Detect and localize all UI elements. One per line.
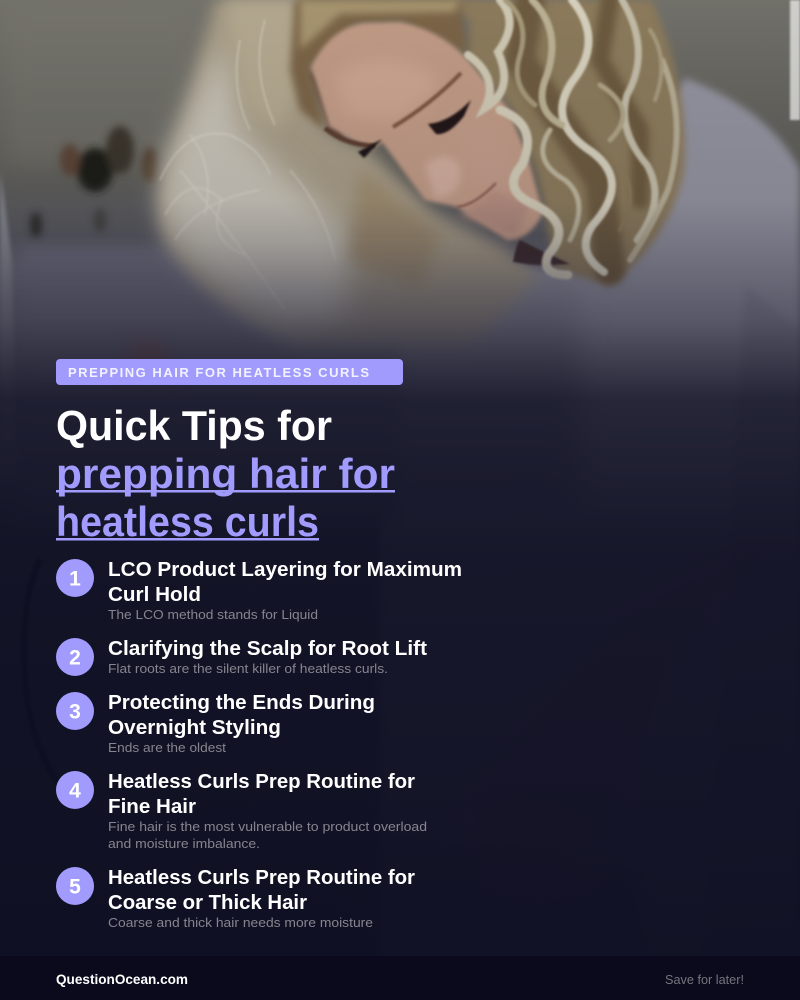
footer bar (0, 956, 800, 1000)
tip 1: LCO Product Layering for Maximum (108, 559, 462, 581)
tip 4: 4 (69, 780, 81, 802)
category badge: PREPPING HAIR FOR HEATLESS CURLS (68, 365, 369, 380)
shirt (380, 78, 800, 1000)
tip 3: 3 (69, 700, 81, 724)
title: prepping hair for (56, 450, 395, 497)
tip 5 (56, 867, 415, 930)
neck shadow (513, 240, 570, 265)
title: heatless curls (56, 498, 319, 545)
footer brand: QuestionOcean.com (56, 971, 188, 987)
wispy left strands (160, 20, 335, 310)
tip 5: Heatless Curls Prep Routine for (108, 867, 415, 889)
hair base (440, 0, 685, 285)
tip 1 (56, 559, 462, 622)
tip 4 (56, 771, 427, 851)
footer note: Save for later! (665, 972, 744, 987)
tip 3: Overnight Styling (108, 717, 281, 739)
category badge (56, 359, 403, 385)
tip 4: Fine hair is the most vulnerable to product overload (108, 819, 427, 834)
title: Quick Tips for (56, 402, 332, 449)
tip 2 (56, 638, 427, 676)
tip 1: 1 (69, 568, 81, 590)
tip 3: Ends are the oldest (108, 740, 226, 755)
tip 5: Coarse and thick hair needs more moisture (108, 915, 373, 930)
tip 4: Heatless Curls Prep Routine for (108, 771, 415, 793)
tip 1: Curl Hold (108, 584, 201, 606)
tip 2: 2 (69, 646, 81, 670)
curls (520, 0, 640, 270)
tip 5: Coarse or Thick Hair (108, 892, 307, 914)
tip 4: and moisture imbalance. (108, 836, 260, 851)
face (311, 22, 543, 240)
title (56, 402, 395, 545)
tip 3: Protecting the Ends During (108, 692, 375, 714)
tip 1: The LCO method stands for Liquid (108, 607, 318, 622)
eyebrow (393, 73, 461, 127)
tip 2: Flat roots are the silent killer of heatless curls. (108, 661, 388, 676)
eyelashes (428, 100, 471, 134)
lower body shapes (0, 245, 580, 505)
lips (457, 183, 496, 207)
tip 5: 5 (69, 876, 81, 898)
tip 3 (56, 692, 375, 755)
tip 4: Fine Hair (108, 796, 196, 818)
tip 2: Clarifying the Scalp for Root Lift (108, 638, 427, 660)
